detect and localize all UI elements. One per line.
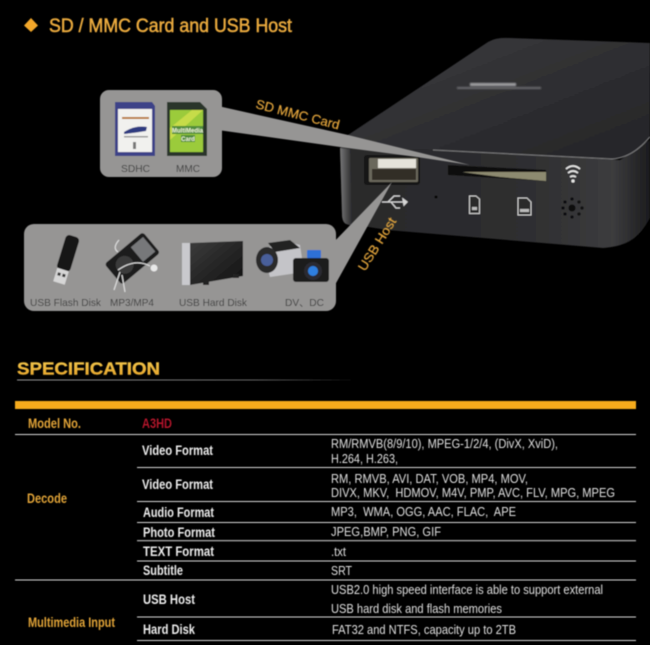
- row: Subtitle: [143, 563, 352, 578]
- table header bar: [15, 401, 636, 409]
- row: Video Format 2: Video Format: [142, 477, 213, 492]
- row: Subtitle: Subtitle: [143, 563, 183, 578]
- row: USB Host: USB2.0 high speed interface is able to support external: [331, 582, 603, 597]
- label: SD MMC Card callout: SD MMC Card: [254, 96, 341, 132]
- specification table: [15, 401, 636, 641]
- group label: Decode: Decode: [27, 491, 67, 506]
- USB port: [364, 155, 420, 185]
- row: Hard Disk: [143, 622, 516, 637]
- icon: USB symbol: [382, 196, 407, 208]
- label: USB Hard Disk: USB Hard Disk: [179, 297, 248, 309]
- label: USB Flash Disk: USB Flash Disk: [30, 297, 102, 309]
- card slot: [448, 165, 546, 181]
- label: MP3/MP4: MP3/MP4: [110, 297, 154, 309]
- row: Video Format 1: RM/RMVB(8/9/10), MPEG-1/2/4, (DivX, XviD),: [331, 436, 558, 451]
- row: TEXT Format: .txt: [331, 544, 346, 559]
- heading: SPECIFICATION: SPECIFICATION: [17, 358, 160, 378]
- row: USB Host: [143, 582, 603, 616]
- row: Model No.: [28, 416, 172, 431]
- label: SDHC: SDHC: [121, 163, 150, 175]
- callout: USB host devices panel: [24, 182, 392, 311]
- row: USB Host: USB Host: [143, 592, 195, 607]
- icon: DC camera: [293, 250, 329, 282]
- speaker holes: [561, 197, 584, 219]
- callout: SD and MMC card panel: [100, 90, 470, 177]
- row: Audio Format: Audio Format: [143, 505, 214, 520]
- row: Video Format 1: Video Format: [142, 443, 213, 458]
- label: MMC: MMC: [176, 163, 200, 175]
- row: Video Format 1: H.264, H.263,: [331, 451, 398, 466]
- row: Photo Format: Photo Format: [143, 525, 215, 540]
- heading: section title with diamond bullet: SD / MMC Card and USB Host: [49, 16, 293, 37]
- row: Audio Format: [143, 504, 516, 520]
- row: Video Format 1: [142, 436, 558, 466]
- row: Video Format 2: RM, RMVB, AVI, DAT, VOB, MP4, MOV,: [331, 471, 528, 486]
- group label: Multimedia Input: Multimedia Input: [28, 615, 115, 630]
- icon: DV camcorder: [256, 240, 304, 277]
- icon: wireless: [566, 166, 580, 183]
- label: DV, DC: DV、DC: [285, 297, 324, 309]
- icon: MMC slot: [518, 198, 531, 215]
- row: Audio Format: MP3, WMA, OGG, AAC, FLAC, APE: [331, 504, 516, 519]
- product: media player device: [340, 38, 650, 248]
- icon: MMC card: [167, 102, 207, 156]
- row: Hard Disk: FAT32 and NTFS, capacity up to 2TB: [332, 622, 516, 637]
- row: Hard Disk: Hard Disk: [143, 622, 195, 637]
- icon: SD slot: [470, 196, 480, 214]
- indicator dot: [434, 196, 438, 198]
- row: Photo Format: JPEG,BMP, PNG, GIF: [331, 524, 441, 539]
- icon: USB hard disk: [182, 241, 243, 285]
- panel background: [24, 224, 336, 311]
- device front face: [340, 140, 650, 248]
- icon: SD card: [115, 102, 155, 156]
- row: Model No.: A3HD: [142, 416, 172, 431]
- label: USB Host callout: USB Host: [355, 214, 400, 274]
- device top edge highlight: [433, 137, 650, 159]
- device top surface: [340, 38, 650, 159]
- icon: MMC card: Card: [181, 137, 195, 143]
- icon: MMC card: MultiMedia: [172, 128, 204, 134]
- panel background: [100, 90, 222, 177]
- row: TEXT Format: [143, 544, 346, 559]
- device logo: [457, 83, 541, 89]
- row: TEXT Format: TEXT Format: [143, 544, 214, 559]
- row: Photo Format: [143, 524, 441, 540]
- callout pointer to card slot: [218, 106, 470, 165]
- row: USB Host: USB hard disk and flash memories: [331, 601, 502, 616]
- row: Subtitle: SRT: [331, 563, 352, 578]
- icon: MP3 and MP4 player: [104, 232, 160, 292]
- row: Model No.: Model No.: [28, 416, 81, 431]
- row: Video Format 2: [142, 471, 615, 500]
- callout pointer to USB port: [330, 182, 392, 294]
- device left edge highlight: [340, 148, 352, 226]
- icon: USB flash disk: [52, 234, 80, 285]
